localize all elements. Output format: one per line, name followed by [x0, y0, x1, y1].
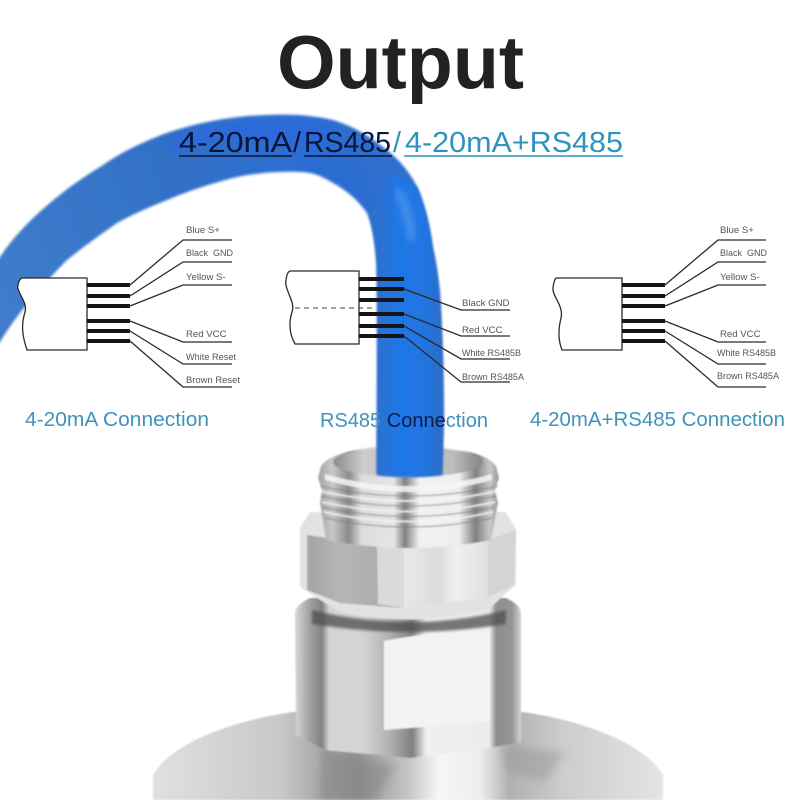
- blue cable: [0, 115, 443, 477]
- lower body: [295, 598, 521, 758]
- lower body collar shadow: [312, 610, 506, 632]
- wire labels left: Red VCC: [186, 329, 227, 340]
- wire labels left: Black GND: [186, 248, 233, 259]
- wire labels right: Blue S+: [720, 225, 754, 236]
- wire labels middle: Red VCC: [462, 325, 503, 336]
- title: Output: [277, 20, 524, 104]
- subtitle: /: [393, 127, 402, 159]
- wire labels middle: Black GND: [462, 298, 510, 309]
- wire labels right: Black GND: [720, 248, 767, 259]
- wire labels left: Yellow S-: [186, 272, 226, 283]
- sensor outline middle: [286, 271, 359, 344]
- heading: 4-20mA+RS485 connection: 4-20mA+RS485 Connection: [530, 409, 785, 431]
- subtitle: RS485: [304, 127, 391, 159]
- leader lines right: [665, 240, 766, 387]
- subtitle: [179, 127, 623, 159]
- subtitle: 4-20mA+RS485: [405, 127, 623, 159]
- internal dashed line: [295, 307, 375, 309]
- flange right shadow: [500, 745, 565, 782]
- flange shadow: [320, 748, 395, 800]
- panel: 4-20mA connection diagram: [18, 225, 240, 387]
- wire labels right: White RS485B: [717, 348, 776, 359]
- panel: 4-20mA+RS485 connection diagram: [553, 225, 780, 387]
- wires middle: [359, 279, 404, 336]
- leader lines left: [130, 240, 232, 387]
- flange: [153, 712, 663, 800]
- wire labels right: Brown RS485A: [717, 371, 780, 382]
- wires left: [87, 285, 130, 341]
- wire labels right: [717, 225, 780, 382]
- sensor outline right: [553, 278, 622, 350]
- leader lines middle: [404, 289, 510, 382]
- wires right: [622, 285, 665, 341]
- subtitle: 4-20mA: [179, 127, 293, 159]
- pipe opening: [333, 447, 483, 477]
- wire labels left: [186, 225, 240, 386]
- threaded neck: [318, 445, 499, 548]
- lower body white flat: [384, 628, 490, 730]
- wire labels left: Blue S+: [186, 225, 220, 236]
- wire labels right: Red VCC: [720, 329, 761, 340]
- wire labels middle: [462, 298, 525, 383]
- panel: RS485 connection diagram: [286, 271, 525, 383]
- wire labels left: White Reset: [186, 352, 236, 363]
- heading: 4-20mA connection: 4-20mA Connection: [25, 409, 209, 431]
- subtitle: /: [293, 127, 302, 159]
- sensor outline left: [18, 278, 87, 350]
- heading: RS485 connection: RS485 Connection: [320, 410, 488, 432]
- hex nut: [300, 512, 516, 620]
- wire labels right: Yellow S-: [720, 272, 760, 283]
- transmitter metal body: [153, 445, 663, 800]
- wire labels left: Brown Reset: [186, 375, 240, 386]
- wire labels middle: White RS485B: [462, 348, 521, 359]
- wire labels middle: Brown RS485A: [462, 372, 525, 383]
